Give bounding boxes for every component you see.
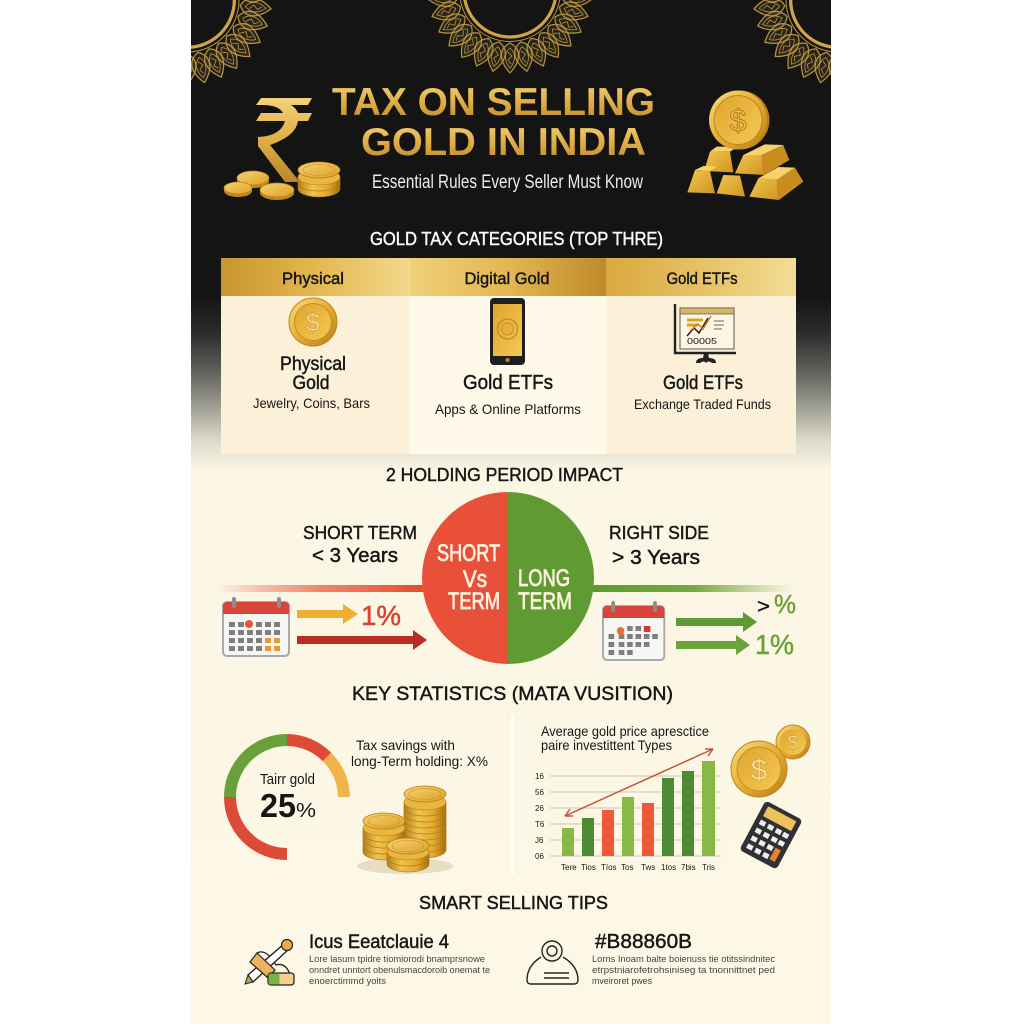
tip 2: mveiroret pwes (592, 976, 652, 986)
icon: rupee symbol with coins (224, 98, 340, 200)
text: tax savings: Tax savings with (356, 737, 455, 753)
panel: physical gold: Gold (292, 373, 330, 394)
chart title: Average gold price apresctice (541, 723, 709, 739)
tip 1: onndret unntort obenulsmacdoroib onemat te (309, 965, 490, 975)
tip 2: etrpstniarofetrohsiniseg ta tnonnittnet ped (592, 965, 775, 975)
value: long term upper: % (774, 589, 796, 619)
tip 1: enoerctimmd yoits (309, 976, 387, 986)
decorative mandala: top centre (428, 0, 592, 73)
chart: short vs long term circle: SHORT (437, 540, 500, 567)
divider between statistics (511, 715, 514, 875)
panel: physical gold: Jewelry, Coins, Bars (253, 395, 370, 411)
bar chart: 16 (535, 772, 544, 781)
subtitle: Essential Rules Every Seller Must Know (372, 172, 643, 193)
chart: short vs long term circle (422, 492, 594, 664)
arrow: green upper (676, 612, 757, 632)
panel: gold ETFs: Gold ETFs (663, 373, 743, 394)
icon: small gold coin (776, 725, 810, 759)
bar chart: 56 (535, 788, 544, 797)
chart: short vs long term circle: Vs (463, 566, 487, 593)
icon: large gold coin: $ (751, 754, 768, 787)
arrow: green lower (676, 635, 750, 655)
icon: gold coin (289, 298, 337, 346)
title: GOLD IN INDIA (361, 121, 646, 164)
chart: short vs long term circle: TERM (448, 588, 500, 615)
decorative mandala: top left (102, 0, 272, 84)
label: right side: RIGHT SIDE (609, 523, 709, 543)
panel: physical gold: Physical (280, 354, 346, 375)
value: long term upper: > (757, 596, 770, 618)
icon: ETF chart monitor (675, 304, 736, 363)
label: right side (609, 523, 709, 569)
bar chart: Tws (641, 863, 655, 872)
panel: digital gold (410, 258, 606, 454)
icon: calculator (739, 800, 803, 870)
chart: short vs long term circle: LONG (518, 565, 570, 592)
bar chart: J6 (535, 836, 544, 845)
icon: small gold coin: $ (788, 733, 799, 754)
bar chart: Tíos (601, 863, 617, 872)
label: right side: > 3 Years (612, 547, 700, 569)
bar chart: Tios (581, 863, 596, 872)
chart title: paire investittent Types (541, 737, 672, 753)
icon: pen and tool (245, 940, 294, 985)
value: short term rate: 1% (361, 600, 401, 631)
poster background (191, 0, 831, 1024)
panel: digital gold: Digital Gold (464, 269, 550, 288)
tip 2: #B88860B (595, 931, 692, 953)
tip 2 (592, 931, 776, 986)
heading: key statistics: KEY STATISTICS (MATA VUSITION) (352, 684, 673, 705)
icon: stacked gold coins (357, 786, 453, 874)
bar chart: Tos (621, 863, 633, 872)
donut gauge: Tairr gold (260, 771, 315, 788)
panel: digital gold: Gold ETFs (463, 372, 553, 394)
bar chart: 7bis (681, 863, 696, 872)
title (332, 81, 655, 164)
panel: physical gold (221, 258, 410, 454)
arrow: orange short term (297, 604, 358, 624)
donut gauge (230, 740, 344, 854)
value: long term lower: 1% (755, 629, 794, 660)
panel: digital gold: Apps & Online Platforms (435, 401, 581, 417)
value: long term upper (757, 589, 796, 619)
panel: gold ETFs (606, 258, 796, 454)
label: short term (303, 523, 417, 567)
heading: holding period impact: 2 HOLDING PERIOD IMPACT (386, 465, 623, 485)
icon: badge outline (527, 941, 578, 984)
donut gauge: % (296, 800, 316, 822)
tip 1: Icus Eeatclauie 4 (309, 932, 449, 953)
bar chart: Tris (702, 863, 715, 872)
donut gauge: 25 (260, 787, 296, 824)
icon: gold coin: $ (306, 309, 320, 337)
arrow: trend line (565, 749, 713, 816)
tip 1 (309, 932, 490, 986)
decorative mandala: top right (753, 0, 923, 84)
text: tax savings: long-Term holding: X% (351, 753, 488, 769)
icon: calendar right (603, 601, 664, 660)
icon: ETF chart monitor: 00005 (687, 337, 718, 346)
heading: gold tax categories: GOLD TAX CATEGORIES (TOP THRE) (370, 229, 663, 249)
bar chart (535, 749, 721, 872)
bar chart: Tere (561, 863, 577, 872)
panel: gold ETFs: Gold ETFs (666, 269, 738, 288)
icon: calendar left (223, 597, 289, 656)
label: short term: SHORT TERM (303, 523, 417, 543)
heading: smart selling tips: SMART SELLING TIPS (419, 893, 608, 913)
chart: short vs long term circle: TERM (518, 588, 572, 615)
icon: large gold coin (731, 741, 787, 797)
edge masks (0, 0, 1024, 120)
bar chart: 26 (535, 804, 544, 813)
text: tax savings (351, 737, 488, 769)
timeline bar: long term (593, 585, 793, 592)
label: short term: < 3 Years (312, 545, 398, 567)
title: TAX ON SELLING (332, 81, 655, 124)
bar chart: T6 (535, 820, 545, 829)
icon: gold bars with coin: $ (729, 103, 747, 138)
tip 2: Lorns Inoam balte boienuss tie otitssindnitec (592, 954, 776, 964)
bar chart: 06 (535, 852, 544, 861)
panel: physical gold: Physical (282, 269, 344, 288)
icon: gold bars with coin (687, 90, 803, 200)
chart title (541, 723, 709, 753)
icon: smartphone (490, 298, 525, 365)
bar chart: 1tos (661, 863, 676, 872)
panel: gold ETFs: Exchange Traded Funds (634, 396, 771, 412)
arrow: dark red short term (297, 630, 427, 650)
timeline bar: short term (215, 585, 425, 592)
tip 1: Lore lasum tpidre tiomiorodi bnamprsnowe (309, 954, 485, 964)
